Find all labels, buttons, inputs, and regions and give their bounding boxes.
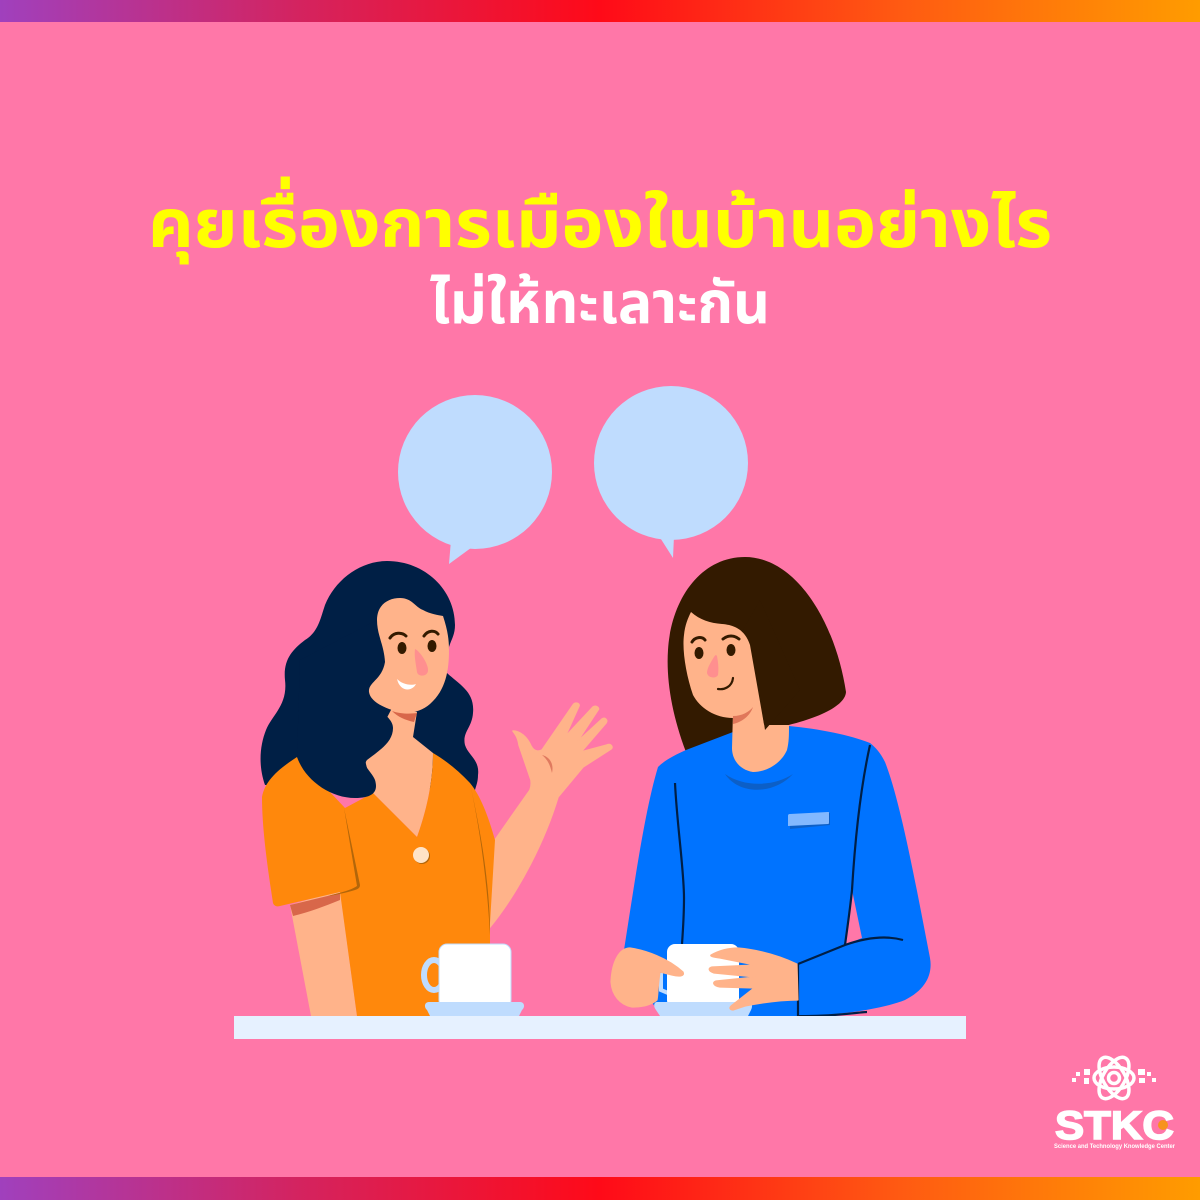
- hair strand over face: [743, 600, 800, 730]
- eyebrows: [390, 631, 438, 638]
- top gradient bar: [0, 0, 1200, 22]
- neck and chest: [365, 708, 433, 837]
- neck: [732, 712, 789, 772]
- cup left: [424, 944, 524, 1016]
- STKC logo: [1054, 1053, 1176, 1150]
- eyes: [398, 640, 436, 654]
- wordmark: STKC: [1055, 1104, 1174, 1148]
- hair: [668, 557, 846, 752]
- palm crease: [542, 755, 553, 773]
- chin shadow: [392, 711, 417, 722]
- nose: [707, 655, 718, 677]
- pixel squares: [1072, 1069, 1156, 1084]
- left arm: [290, 890, 357, 1016]
- logo orange dot: [1158, 1120, 1168, 1130]
- orange blouse: [262, 753, 495, 1016]
- logo tagline: Science and Technology Knowledge Center: [1054, 1144, 1176, 1150]
- name badge: [790, 813, 830, 829]
- hair back: [261, 561, 478, 790]
- sleeve cuff shadow: [290, 893, 340, 916]
- eyes: [694, 644, 736, 659]
- chin shadow: [733, 707, 753, 724]
- hair front: [297, 620, 393, 798]
- cup right: [654, 944, 752, 1016]
- woman in blue: [624, 557, 931, 1016]
- title: คุยเรื่องการเมืองในบ้านอย่างไร: [148, 175, 1052, 278]
- title: ไม่ให้ทะเลาะกัน: [430, 260, 770, 350]
- face: [683, 612, 765, 730]
- title: [148, 175, 1052, 350]
- speech bubble left: [398, 395, 552, 564]
- bottom gradient bar: [0, 1177, 1200, 1200]
- table: [234, 1016, 966, 1039]
- atom icon: [1093, 1053, 1135, 1103]
- woman in orange: [261, 561, 612, 1016]
- collar shadow: [725, 774, 793, 790]
- blouse fold lines: [328, 808, 360, 896]
- blue shirt: [624, 726, 931, 1016]
- nose: [415, 649, 428, 676]
- gap between arm and body: [845, 890, 862, 945]
- raised arm and hand: [483, 703, 612, 927]
- smile: [397, 679, 416, 689]
- smile: [718, 678, 733, 689]
- shirt seams: [675, 745, 903, 1016]
- speech bubble right: [594, 386, 748, 558]
- necklace button: [414, 848, 430, 864]
- hands around cup: [611, 948, 798, 1010]
- eyebrows: [692, 636, 739, 642]
- face: [369, 598, 449, 713]
